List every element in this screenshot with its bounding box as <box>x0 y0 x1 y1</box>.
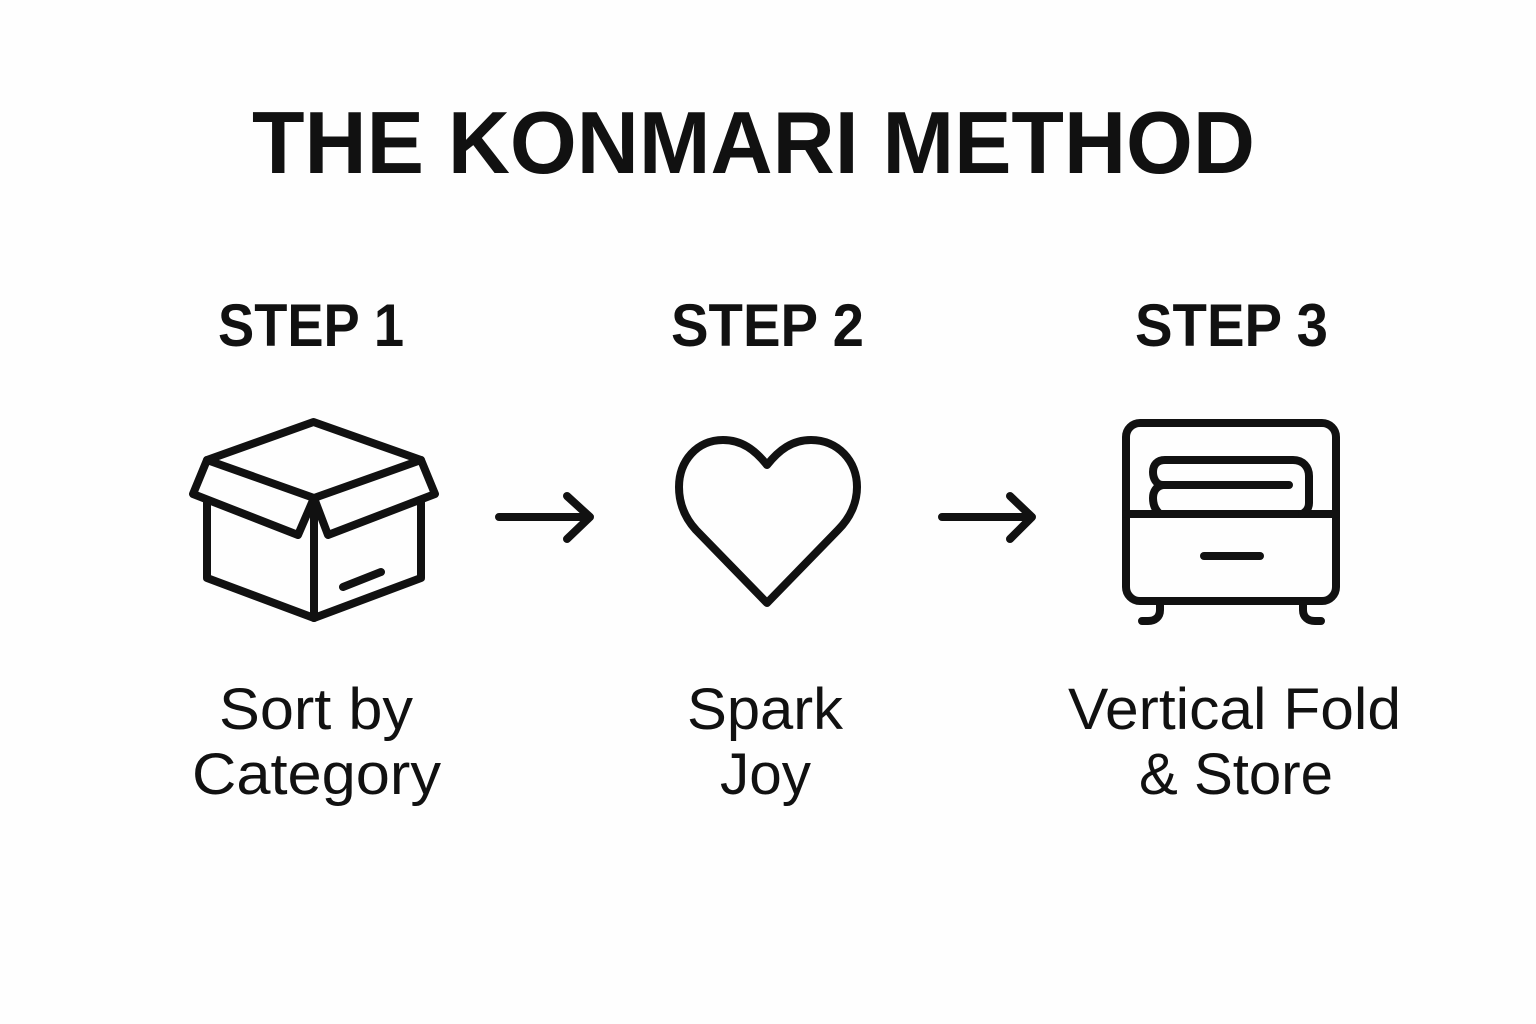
text: vertical fold and store: & Store <box>1139 742 1333 807</box>
panel: step 2 <box>671 292 864 807</box>
text: spark joy <box>687 677 844 807</box>
icon: nightstand with folded towels <box>1126 423 1336 621</box>
icon: open box <box>193 422 435 618</box>
text: sort by category: Category <box>192 742 441 807</box>
heading: step 1: STEP 1 <box>218 292 404 359</box>
arrow: step 1 to step 2 <box>499 496 590 539</box>
text: sort by category: Sort by <box>219 677 413 742</box>
icon: heart <box>679 440 857 603</box>
text: spark joy: Spark <box>687 677 844 742</box>
text: vertical fold and store <box>1068 677 1401 807</box>
text: spark joy: Joy <box>720 742 811 807</box>
heading: step 3: STEP 3 <box>1135 292 1328 359</box>
text: vertical fold and store: Vertical Fold <box>1068 677 1401 742</box>
arrow: step 2 to step 3 <box>942 496 1032 539</box>
text: sort by category <box>192 677 441 807</box>
title: THE KONMARI METHOD <box>252 93 1255 192</box>
panel: step 1 <box>192 292 441 807</box>
heading: step 2: STEP 2 <box>671 292 864 359</box>
panel: step 3 <box>1068 292 1401 807</box>
